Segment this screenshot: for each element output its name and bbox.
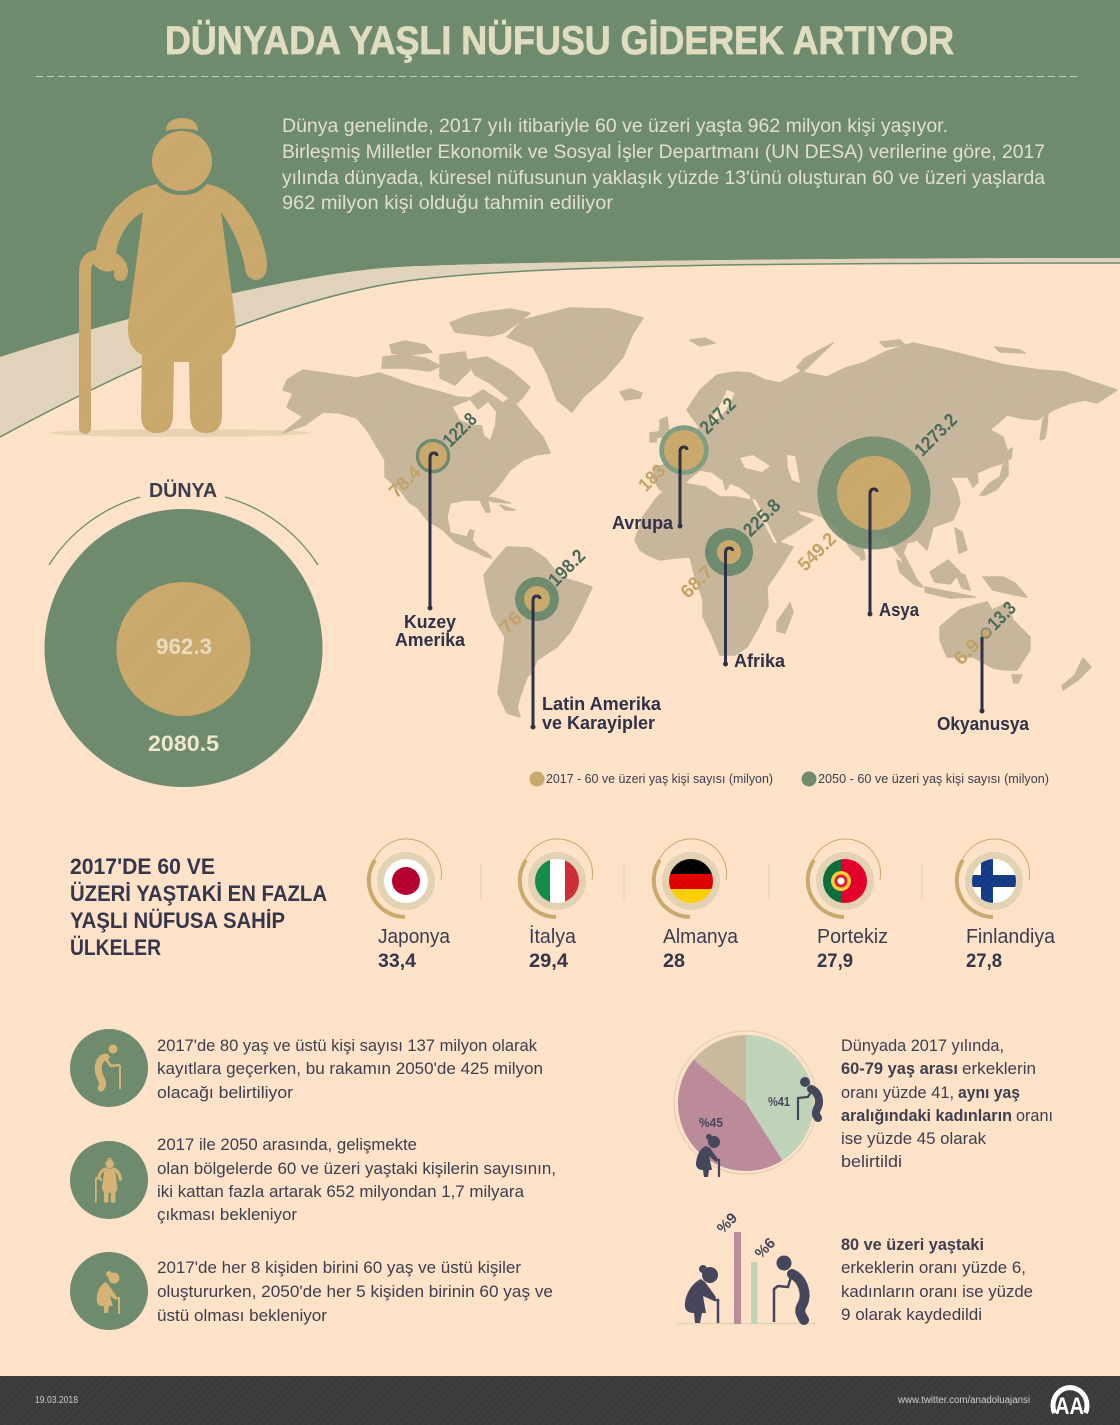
bubble: Asia [818, 436, 930, 550]
footer: 19.03.2018 [35, 1395, 78, 1406]
logo: AA [1055, 1393, 1084, 1420]
footer: www.twitter.com/anadoluajansi [897, 1395, 1030, 1406]
bar chart: %9 [714, 1210, 741, 1237]
region labels [395, 512, 1030, 734]
flag: Italy [520, 839, 593, 917]
bubble values: 1273.2 [911, 410, 962, 461]
flag: Finland [957, 839, 1030, 917]
country labels: 33,4 [378, 951, 416, 972]
text: age 80+: 80 ve üzeri yaştaki [841, 1236, 984, 1254]
country labels: 27,9 [817, 951, 853, 972]
bar chart [677, 1210, 816, 1324]
pie chart: %41 [768, 1094, 790, 1109]
bubble: Europe [659, 425, 709, 475]
text: age 60-79: erkeklerin [962, 1060, 1036, 1078]
map legend [530, 772, 1049, 786]
bubble values: 247.2 [696, 394, 741, 439]
pie chart: %45 [699, 1115, 723, 1130]
intro text: 962 milyon kişi olduğu tahmin ediliyor [282, 193, 614, 214]
bubble values: 68.7 [677, 562, 718, 603]
text: age 60-79: oranı yüzde 41, [841, 1084, 954, 1102]
country labels: Japonya [378, 926, 451, 948]
text: age 60-79: oranı [1016, 1107, 1053, 1125]
text block 1: olacağı belirtiliyor [157, 1084, 294, 1102]
text: age 60-79: belirtildi [841, 1153, 902, 1171]
country labels: 28 [663, 951, 685, 972]
text block 3: üstü olması bekleniyor [157, 1307, 328, 1325]
bubble values: 183 [635, 461, 670, 496]
text block 3 [157, 1259, 553, 1325]
icon: man by bars [774, 1256, 805, 1322]
intro text: yılında dünyada, küresel nüfusunun yaklaşık yüzde 13'ünü oluşturan 60 ve üzeri yaşlarda [282, 168, 1045, 189]
title: DÜNYADA YAŞLI NÜFUSU GİDEREK ARTIYOR [165, 18, 954, 63]
country labels: 29,4 [529, 951, 568, 972]
separators [481, 864, 922, 899]
text: age 80+: kadınların oranı ise yüzde [841, 1283, 1033, 1301]
icon: bent woman [70, 1252, 148, 1330]
intro text: Birleşmiş Milletler Ekonomik ve Sosyal İşler Departmanı (UN DESA) verilerine göre, 2017 [282, 142, 1045, 163]
panel: world total: 2080.5 [148, 731, 219, 756]
country labels: Portekiz [817, 926, 888, 948]
text block 2 [157, 1136, 556, 1224]
text: age 80+: erkeklerin oranı yüzde 6, [841, 1259, 1026, 1277]
pie chart [674, 1031, 819, 1177]
text block 2: olan bölgelerde 60 ve üzeri yaştaki kişilerin sayısının, [157, 1160, 556, 1178]
region labels: Latin Amerika [542, 693, 662, 714]
flag: Portugal [808, 839, 881, 917]
text block 1: kayıtlara geçerken, bu rakamın 2050'de 425 milyon [157, 1060, 543, 1078]
heading: top countries: ÜZERİ YAŞTAKİ EN FAZLA [70, 881, 327, 906]
intro text: Dünya genelinde, 2017 yılı itibariyle 60 ve üzeri yaşta 962 milyon kişi yaşıyor. [282, 116, 948, 137]
bar chart: %6 [752, 1235, 779, 1262]
intro text [282, 116, 1045, 214]
region labels: Amerika [395, 629, 466, 650]
bubble: North America [416, 439, 450, 473]
text block 2: 2017 ile 2050 arasında, gelişmekte [157, 1136, 417, 1154]
heading: top countries [70, 854, 327, 960]
bubble: Africa [705, 528, 753, 576]
text: age 60-79: aralığındaki kadınların [841, 1107, 1012, 1125]
text block 2: çıkması bekleniyor [157, 1206, 298, 1224]
text: age 60-79: 60-79 yaş arası [841, 1060, 958, 1078]
header band [0, 0, 1120, 437]
bubble values: 78.4 [385, 462, 426, 503]
text block 2: iki kattan fazla artarak 652 milyondan 1,7 milyara [157, 1183, 525, 1201]
bubble values: 198.2 [545, 546, 590, 591]
seas cut from the map [453, 342, 815, 543]
icon: woman [70, 1141, 148, 1219]
region labels: Asya [879, 599, 920, 620]
text: age 60-79 [841, 1037, 1053, 1171]
heading: top countries: YAŞLI NÜFUSA SAHİP [70, 908, 285, 933]
map legend: 2050 - 60 ve üzeri yaş kişi sayısı (milyon) [818, 772, 1049, 786]
text block 1: 2017'de 80 yaş ve üstü kişi sayısı 137 milyon olarak [157, 1037, 538, 1055]
cane pointers [428, 447, 984, 730]
world map [283, 308, 1117, 717]
panel: world total [44, 479, 322, 787]
region labels: Kuzey [404, 611, 457, 632]
text block 3: oluştururken, 2050'de her 5 kişiden birinin 60 yaş ve [157, 1283, 553, 1301]
region labels: Avrupa [612, 512, 674, 533]
bubble values [385, 394, 1021, 670]
map legend: 2017 - 60 ve üzeri yaş kişi sayısı (milyon) [546, 772, 773, 786]
heading: top countries: 2017'DE 60 VE [70, 854, 215, 879]
bubble values: 76 [496, 608, 527, 639]
region labels: Okyanusya [937, 713, 1030, 734]
icon: woman by bars [685, 1265, 718, 1323]
bubble values: 122.8 [439, 409, 482, 452]
country labels: İtalya [529, 925, 577, 948]
footer [0, 1376, 1120, 1425]
text block 1 [157, 1037, 543, 1102]
bubble: Oceania [980, 628, 992, 638]
text: age 60-79: Dünyada 2017 yılında, [841, 1037, 1004, 1055]
bubble: Latin America [515, 577, 559, 621]
text block 3: 2017'de her 8 kişiden birini 60 yaş ve üstü kişiler [157, 1259, 522, 1277]
bubble values: 13.3 [984, 598, 1021, 635]
bubble values: 6.9 [950, 635, 985, 670]
country labels: Finlandiya [966, 926, 1056, 948]
country labels: Almanya [663, 926, 739, 948]
country labels [378, 925, 1056, 972]
flag: Japan [369, 839, 442, 917]
heading: Dünya: DÜNYA [149, 479, 217, 502]
text: age 60-79: ise yüzde 45 olarak [841, 1130, 987, 1148]
text: age 80+ [841, 1236, 1033, 1324]
icon: woman on pie [696, 1134, 720, 1177]
bubble values: 225.8 [739, 495, 785, 541]
icon: man on pie [798, 1077, 819, 1120]
region labels: ve Karayipler [542, 712, 655, 733]
country labels: 27,8 [966, 951, 1002, 972]
text: age 80+: 9 olarak kaydedildi [841, 1306, 982, 1324]
flag: Germany [654, 839, 727, 917]
text: age 60-79: aynı yaş [958, 1084, 1020, 1102]
heading: top countries: ÜLKELER [70, 935, 161, 960]
panel: world total: 962.3 [156, 634, 212, 659]
bubble values: 549.2 [794, 529, 841, 576]
region labels: Afrika [734, 650, 786, 671]
icon: stooped man [70, 1029, 148, 1107]
icon: elderly woman with cane [50, 118, 310, 437]
